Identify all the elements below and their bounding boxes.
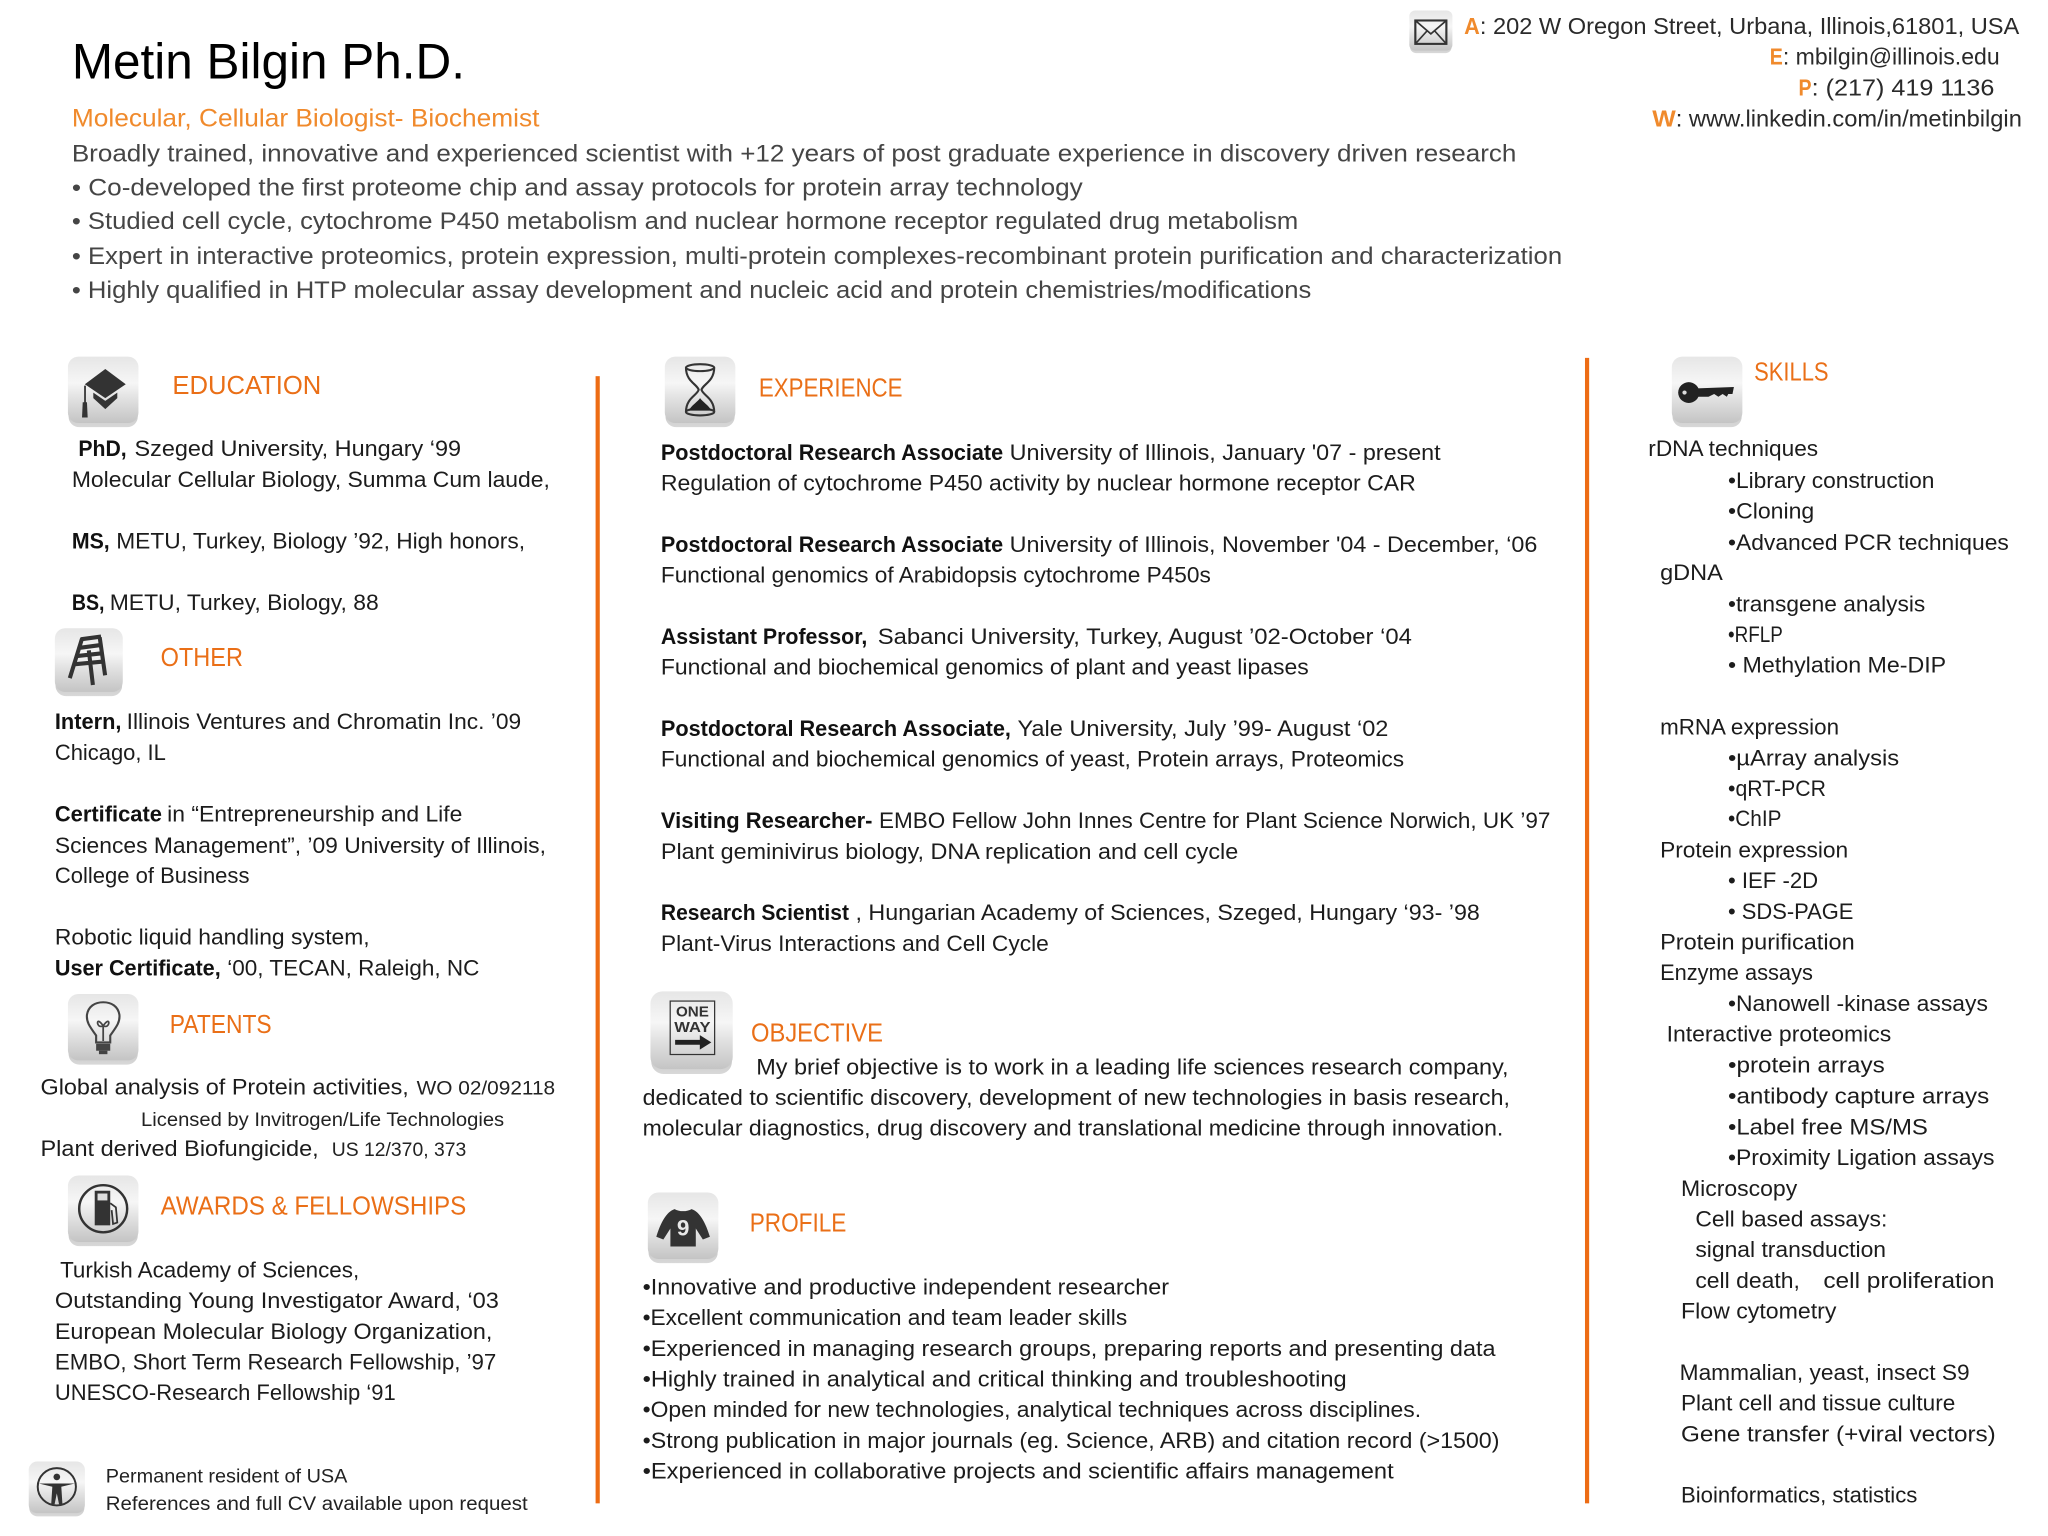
- icon: one way sign: ONE: [676, 1005, 709, 1020]
- contact: web: W: [1652, 106, 1677, 132]
- icon: human figure: [29, 1462, 85, 1516]
- text block: skills list: • IEF -2D: [1728, 868, 1818, 893]
- heading: awards and fellowships: AWARDS & FELLOWSHIPS: [161, 1191, 466, 1221]
- icon: one way sign: WAY: [674, 1020, 711, 1036]
- text block: skills list: •Cloning: [1728, 499, 1814, 524]
- icon: jersey: [648, 1192, 718, 1263]
- text block: awards: EMBO, Short Term Research Fellowship, ’97: [55, 1349, 496, 1374]
- text block: awards: European Molecular Biology Organization,: [55, 1319, 492, 1344]
- text block: experience entries: Assistant Professor,: [661, 624, 867, 649]
- icon: light bulb: [68, 994, 138, 1065]
- text block: education: MS,: [72, 529, 110, 554]
- text block: experience entries: Research Scientist: [661, 900, 850, 925]
- contact: email: : mbilgin@illinois.edu: [1783, 44, 2000, 70]
- panel: profile: [643, 1192, 1499, 1484]
- text block: skills list: •Label free MS/MS: [1728, 1114, 1928, 1139]
- text block: education: METU, Turkey, Biology, 88: [110, 590, 379, 615]
- text block: awards: UNESCO-Research Fellowship ‘91: [55, 1380, 396, 1405]
- text block: skills list: •RFLP: [1728, 622, 1783, 647]
- text block: skills list: Interactive proteomics: [1667, 1022, 1891, 1047]
- text block: patents: US 12/370, 373: [332, 1140, 466, 1161]
- heading: profile: PROFILE: [750, 1208, 846, 1238]
- text block: education: Szeged University, Hungary ‘99: [135, 436, 461, 461]
- text block: other: Intern,: [55, 709, 121, 734]
- text block: experience entries: EMBO Fellow John Innes Centre for Plant Science Norwich, UK ’97: [879, 808, 1550, 833]
- contact block: [1409, 10, 2022, 132]
- text block: education: Molecular Cellular Biology, Summa Cum laude,: [72, 467, 550, 492]
- contact: address: : 202 W Oregon Street, Urbana, Illinois,61801, USA: [1480, 13, 2020, 39]
- text block: patents: Licensed by Invitrogen/Life Technologies: [141, 1110, 504, 1131]
- contact: web: : www.linkedin.com/in/metinbilgin: [1676, 106, 2022, 132]
- text block: skills list: mRNA expression: [1660, 715, 1839, 740]
- text block: other: ‘00, TECAN, Raleigh, NC: [227, 956, 479, 981]
- text block: experience entries: University of Illinois, November '04 - December, ‘06: [1010, 532, 1537, 557]
- text block: experience entries: Functional genomics of Arabidopsis cytochrome P450s: [661, 563, 1211, 588]
- text block: skills list: cell proliferation: [1823, 1268, 1994, 1293]
- text block: education: [72, 436, 550, 615]
- icon: graduation cap: [68, 357, 138, 427]
- text block: skills list: •protein arrays: [1728, 1052, 1885, 1077]
- text block: other: Chicago, IL: [55, 740, 166, 765]
- icon: fuel pump: [68, 1176, 138, 1246]
- text block: experience entries: Postdoctoral Research Associate: [661, 532, 1003, 557]
- text block: education: PhD,: [78, 436, 127, 461]
- heading: objective: OBJECTIVE: [751, 1018, 883, 1048]
- text block: objective: My brief objective is to work in a leading life sciences research company,: [756, 1054, 1509, 1079]
- text block: experience entries: Postdoctoral Research Associate,: [661, 716, 1011, 741]
- panel: residency note: [29, 1462, 528, 1516]
- text block: other: in “Entrepreneurship and Life: [167, 802, 462, 827]
- heading: experience: EXPERIENCE: [759, 372, 903, 402]
- icon: one way sign: [650, 991, 733, 1074]
- text block: education: METU, Turkey, Biology ’92, High honors,: [116, 529, 525, 554]
- summary text: • Highly qualified in HTP molecular assay development and nucleic acid and protein chemistries/modifications: [72, 277, 1311, 304]
- text block: skills list: rDNA techniques: [1648, 436, 1818, 461]
- text block: profile bullets: •Highly trained in analytical and critical thinking and troubleshooting: [643, 1366, 1347, 1391]
- text block: skills list: Plant cell and tissue culture: [1681, 1391, 1955, 1416]
- text block: skills list: •Proximity Ligation assays: [1728, 1145, 1994, 1170]
- text block: awards: Turkish Academy of Sciences,: [60, 1257, 359, 1282]
- text block: experience entries: Functional and biochemical genomics of yeast, Protein arrays, Proteomics: [661, 747, 1404, 772]
- text block: experience entries: [661, 440, 1550, 956]
- text block: experience entries: Sabanci University, Turkey, August ’02-October ‘04: [878, 624, 1412, 649]
- text block: skills list: •transgene analysis: [1728, 591, 1925, 616]
- heading: skills: SKILLS: [1754, 357, 1829, 387]
- text block: skills list: •µArray analysis: [1728, 745, 1899, 770]
- text block: skills list: •antibody capture arrays: [1728, 1084, 1989, 1109]
- contact: address: A: [1464, 13, 1480, 39]
- heading: education: EDUCATION: [172, 370, 321, 400]
- panel: skills: [1648, 357, 2009, 1508]
- text block: profile bullets: •Experienced in collaborative projects and scientific affairs management: [643, 1459, 1394, 1484]
- text block: skills list: •Advanced PCR techniques: [1728, 530, 2009, 555]
- summary text: • Co-developed the first proteome chip and assay protocols for protein array technology: [72, 174, 1084, 201]
- icon: ladder: [55, 628, 123, 696]
- text block: skills list: •Nanowell -kinase assays: [1728, 991, 1988, 1016]
- text block: objective: dedicated to scientific discovery, development of new technologies in basis research,: [643, 1085, 1510, 1110]
- text block: experience entries: , Hungarian Academy of Sciences, Szeged, Hungary ‘93- ’98: [856, 900, 1480, 925]
- panel: objective: [643, 991, 1510, 1141]
- text block: awards: Outstanding Young Investigator Award, ‘03: [55, 1288, 499, 1313]
- text block: experience entries: Yale University, July ’99- August ‘02: [1017, 716, 1388, 741]
- text block: other: Illinois Ventures and Chromatin Inc. ’09: [127, 709, 521, 734]
- text block: profile bullets: •Open minded for new technologies, analytical techniques across disciplines.: [643, 1397, 1421, 1422]
- panel: other: [55, 628, 546, 981]
- text block: residency and references: References and full CV available upon request: [106, 1494, 528, 1515]
- text block: education: BS,: [72, 590, 104, 615]
- text block: skills list: signal transduction: [1695, 1237, 1886, 1262]
- panel: awards and fellowships: [55, 1176, 499, 1405]
- text block: experience entries: University of Illinois, January '07 - present: [1010, 440, 1441, 465]
- text block: skills list: Protein expression: [1660, 837, 1848, 862]
- text block: objective: [643, 1054, 1510, 1141]
- text block: skills list: [1648, 436, 2009, 1508]
- panel: patents: [40, 994, 555, 1161]
- text block: skills list: Mammalian, yeast, insect S9: [1680, 1360, 1970, 1385]
- title: name: Metin Bilgin Ph.D.: [72, 33, 465, 89]
- text block: patents: Plant derived Biofungicide,: [40, 1136, 319, 1161]
- text block: profile bullets: •Innovative and productive independent researcher: [643, 1274, 1170, 1299]
- text block: patents: WO 02/092118: [417, 1079, 555, 1100]
- text block: experience entries: Functional and biochemical genomics of plant and yeast lipases: [661, 655, 1309, 680]
- summary text: • Expert in interactive proteomics, protein expression, multi-protein complexes-recombinant protein purification and characterization: [72, 243, 1562, 270]
- text block: skills list: Cell based assays:: [1695, 1206, 1887, 1231]
- text block: experience entries: Postdoctoral Research Associate: [661, 440, 1003, 465]
- text block: other: [55, 709, 546, 981]
- text block: residency and references: Permanent resident of USA: [106, 1466, 348, 1487]
- text block: other: User Certificate,: [55, 956, 221, 981]
- text block: skills list: •ChIP: [1728, 806, 1782, 831]
- text block: profile bullets: •Experienced in managing research groups, preparing reports and presenting data: [643, 1336, 1496, 1361]
- text block: profile bullets: •Excellent communication and team leader skills: [643, 1305, 1127, 1330]
- text block: experience entries: Plant geminivirus biology, DNA replication and cell cycle: [661, 839, 1238, 864]
- panel: experience: [661, 357, 1550, 956]
- text block: skills list: • SDS-PAGE: [1728, 899, 1853, 924]
- text block: skills list: •Library construction: [1728, 468, 1934, 493]
- text block: patents: Global analysis of Protein activities,: [40, 1075, 409, 1100]
- text block: objective: molecular diagnostics, drug discovery and translational medicine through innovation.: [643, 1116, 1503, 1141]
- text block: other: Certificate: [55, 802, 162, 827]
- text block: skills list: Gene transfer (+viral vectors): [1681, 1421, 1996, 1446]
- heading: patents: PATENTS: [170, 1009, 272, 1039]
- text block: other: Robotic liquid handling system,: [55, 924, 370, 949]
- text block: awards: [55, 1257, 499, 1405]
- text block: skills list: cell death,: [1695, 1268, 1800, 1293]
- text block: patents: [40, 1075, 555, 1161]
- text block: skills list: Flow cytometry: [1681, 1299, 1837, 1324]
- text block: skills list: • Methylation Me-DIP: [1728, 653, 1946, 678]
- text block: experience entries: Regulation of cytochrome P450 activity by nuclear hormone receptor CAR: [661, 470, 1416, 495]
- contact: phone: P: [1799, 74, 1812, 100]
- text block: skills list: Protein purification: [1660, 930, 1855, 955]
- contact: phone: : (217) 419 1136: [1812, 74, 1994, 100]
- heading: other: OTHER: [161, 642, 243, 672]
- icon: jersey: 9: [677, 1216, 689, 1240]
- text block: skills list: Enzyme assays: [1660, 960, 1813, 985]
- panel: education: [68, 357, 550, 615]
- text block: skills list: gDNA: [1660, 560, 1723, 585]
- text block: skills list: Bioinformatics, statistics: [1681, 1483, 1917, 1508]
- text block: skills list: •qRT-PCR: [1728, 776, 1826, 801]
- text block: profile bullets: [643, 1274, 1499, 1484]
- text block: skills list: Microscopy: [1681, 1176, 1798, 1201]
- icon: key: [1672, 357, 1742, 427]
- text block: residency and references: [106, 1466, 528, 1515]
- summary text: • Studied cell cycle, cytochrome P450 metabolism and nuclear hormone receptor regulated drug metabolism: [72, 208, 1298, 235]
- text block: other: Sciences Management”, ’09 University of Illinois,: [55, 833, 546, 858]
- text block: other: College of Business: [55, 863, 249, 888]
- subtitle: Molecular, Cellular Biologist- Biochemist: [72, 106, 540, 133]
- header: name and summary: [72, 33, 1562, 304]
- summary text: [72, 140, 1562, 304]
- icon: hourglass: [665, 357, 735, 427]
- text block: profile bullets: •Strong publication in major journals (eg. Science, ARB) and citation record (>1500): [643, 1428, 1499, 1453]
- contact: email: E: [1770, 44, 1783, 70]
- icon: envelope: [1409, 10, 1452, 53]
- text block: experience entries: Plant-Virus Interactions and Cell Cycle: [661, 931, 1049, 956]
- summary text: Broadly trained, innovative and experienced scientist with +12 years of post graduate experience in discovery driven research: [72, 140, 1516, 167]
- text block: experience entries: Visiting Researcher-: [661, 808, 872, 833]
